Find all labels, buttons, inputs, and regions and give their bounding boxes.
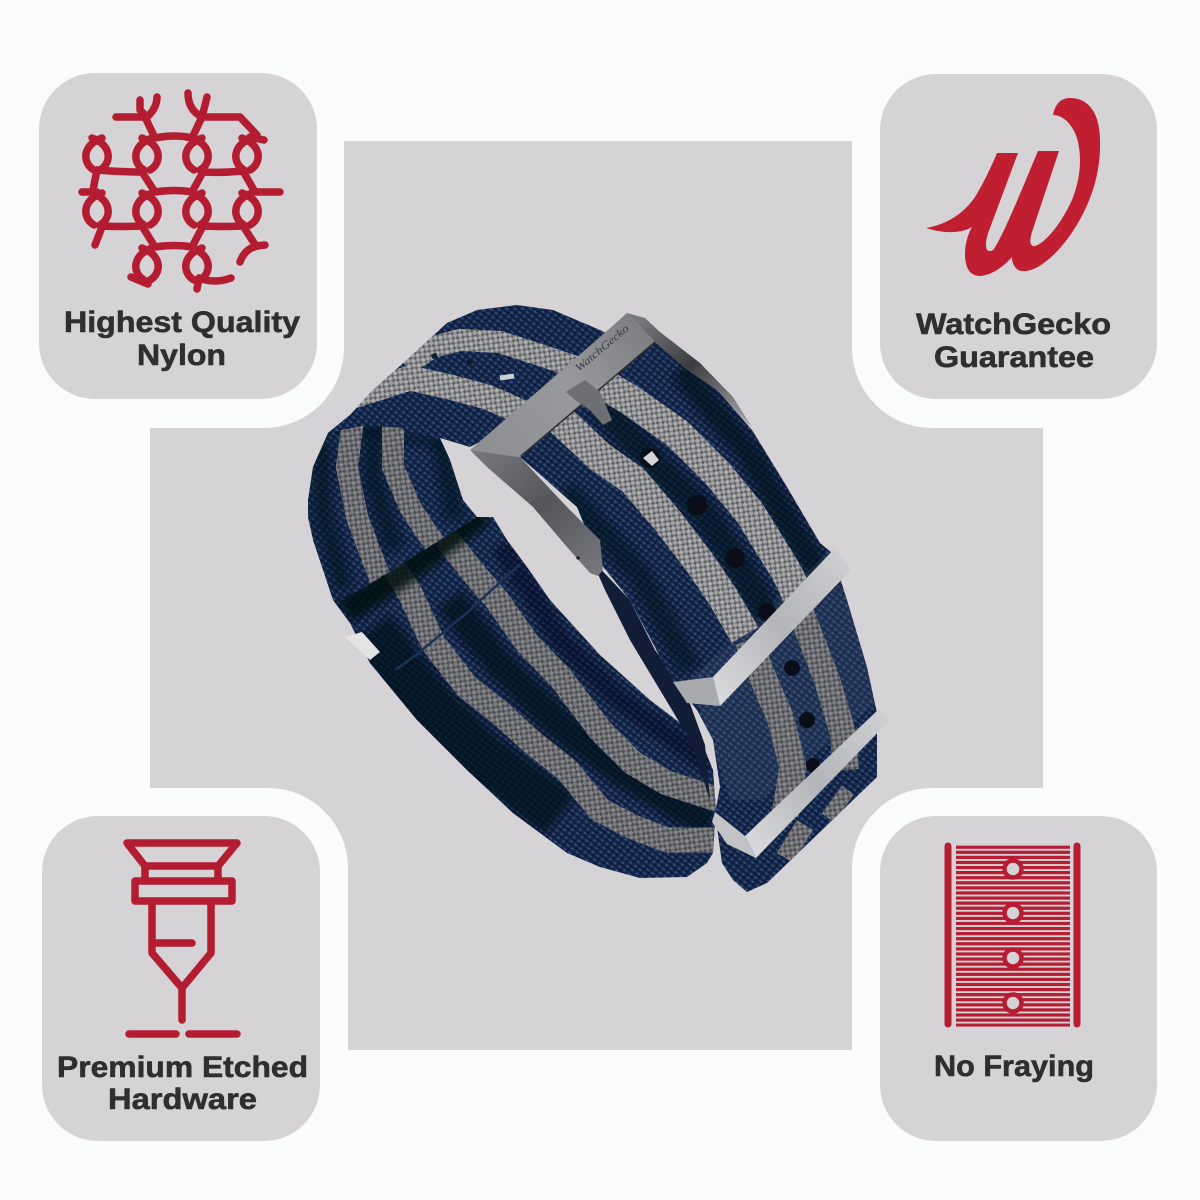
product photo: nylon watch strap [300,300,890,900]
icon: laser etcher [127,843,237,1034]
buckle engraving: WatchGecko [573,322,632,374]
strap: left keeper [345,632,380,660]
strap: upper back band [328,305,605,447]
label [916,308,1111,374]
label: Premium Etched [57,1051,308,1084]
strap: punched holes [640,448,820,772]
strap: under layer [592,560,710,800]
icon: nylon weave [82,93,280,289]
buckle tongue [566,380,612,425]
label [64,306,300,372]
card background [39,73,317,399]
card background [880,816,1157,1141]
halo: top-left card cut-out [0,0,344,428]
label: Nylon [137,339,226,372]
label: Hardware [108,1083,257,1116]
halo: bottom-left card cut-out [0,788,348,1200]
icon: woven strap with holes [948,846,1077,1027]
strap: inner left face [308,415,477,600]
card background [42,816,320,1141]
strap: front band with holes [510,330,890,900]
label: Highest Quality [64,306,300,339]
label: WatchGecko [916,308,1111,341]
panel: central grey cross backdrop [150,141,1043,1050]
keeper: upper steel loop [673,548,851,706]
buckle [470,313,752,576]
panel: no fraying [880,816,1157,1141]
panel: premium etched hardware [42,816,320,1141]
label: Guarantee [934,341,1094,374]
card background [880,74,1157,399]
panel: watchgecko guarantee [880,74,1157,399]
halo: top-right card cut-out [852,0,1200,428]
label: No Fraying [934,1050,1094,1083]
panel: highest quality nylon [39,73,317,399]
icon: W logo [926,98,1100,276]
keeper: lower steel loop [712,708,888,858]
label [57,1051,308,1116]
strap: lower band [333,517,716,878]
halo: bottom-right card cut-out [852,788,1200,1200]
